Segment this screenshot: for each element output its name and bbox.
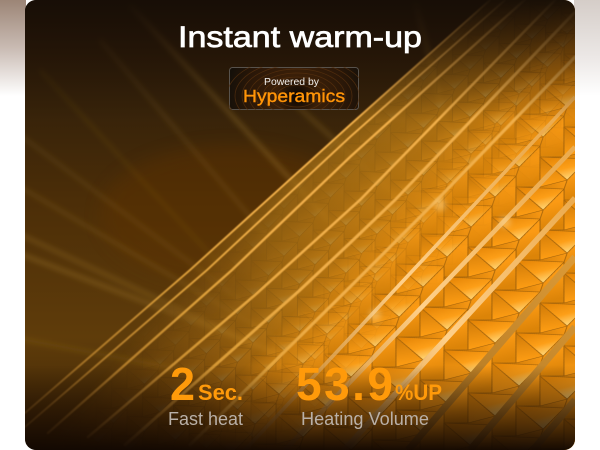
mesh near cells [232,34,575,450]
bottom shadow [25,365,575,450]
badge plate [230,68,358,110]
stat unit: Sec. [198,380,243,405]
badge swirl texture [229,67,359,110]
mesh far cells [113,0,575,450]
background: blurred photo strip, left [0,0,26,96]
badge brand text: Hyperamics [243,86,345,106]
top shadow [25,0,575,120]
stat label: Fast heat [168,409,243,429]
mesh gold underglow [166,2,575,450]
light streaks [25,36,430,364]
triangular mesh [113,0,575,450]
stat value: 2 [170,358,195,410]
stat label: Heating Volume [301,409,429,429]
badge: Powered by Hyperamics [229,67,359,110]
stat: 2 Sec. fast heat [168,358,243,429]
diffuse glow, left side [126,149,304,194]
stat: 53.9 %UP heating volume [296,358,442,429]
title: Instant warm-up [178,21,422,54]
glints on wires [369,199,511,321]
wires, wide lower group [245,97,575,450]
stat value: 53.9 [296,358,393,410]
stat unit: %UP [395,380,442,405]
badge small text: Powered by [264,76,320,88]
background: blurred photo strip, right [574,0,600,96]
